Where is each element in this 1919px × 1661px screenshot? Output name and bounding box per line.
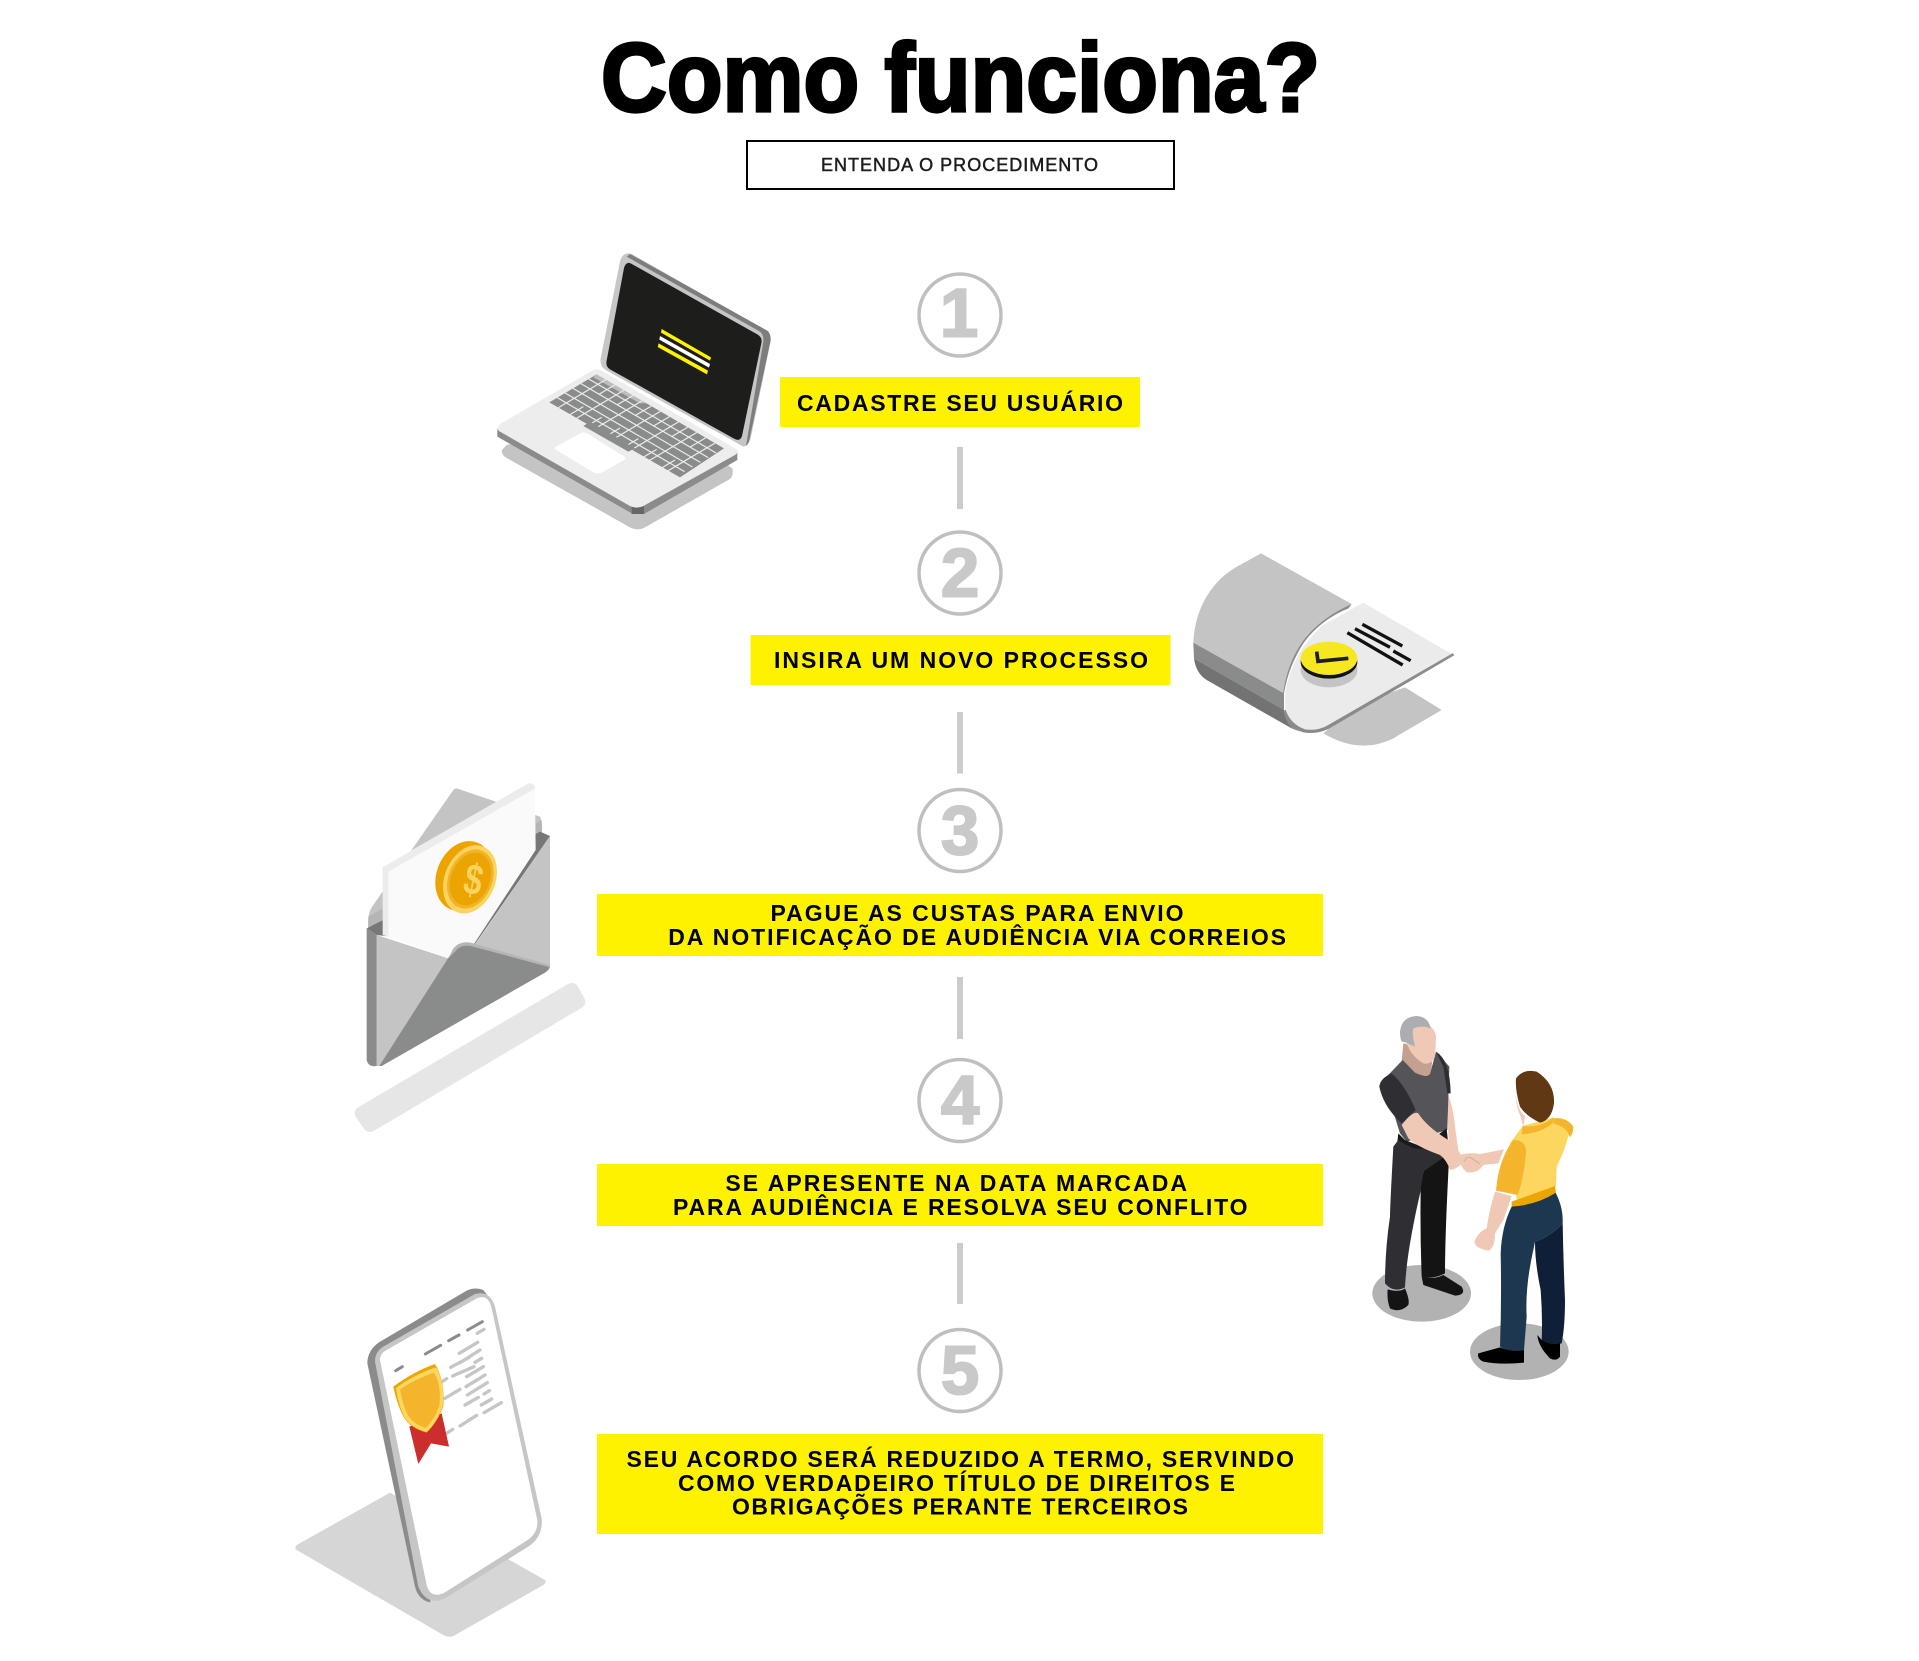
step 5 number badge bbox=[919, 1330, 1001, 1412]
step 2 label: INSIRA UM NOVO PROCESSO bbox=[774, 647, 1148, 673]
keyboard bbox=[549, 374, 724, 477]
connector 3 to 4 bbox=[957, 977, 963, 1039]
step 5 label: OBRIGAÇÕES PERANTE TERCEIROS bbox=[732, 1492, 1188, 1520]
ribbon bbox=[409, 1413, 449, 1464]
younger man bbox=[1458, 1071, 1573, 1364]
step 1 number badge bbox=[919, 274, 1001, 356]
step 2 label bbox=[750, 635, 1170, 685]
connector 4 to 5 bbox=[957, 1243, 963, 1304]
coin bbox=[425, 832, 507, 922]
step 3 label bbox=[597, 894, 1323, 956]
step 4 label: PARA AUDIÊNCIA E RESOLVA SEU CONFLITO bbox=[673, 1193, 1248, 1220]
illustration: handshake between two people bbox=[1372, 1016, 1573, 1380]
step 2 number badge bbox=[919, 532, 1001, 614]
icon: document with seal bbox=[1193, 553, 1453, 746]
connector 2 to 3 bbox=[957, 712, 963, 774]
step 1 number badge: 1 bbox=[940, 274, 978, 352]
step 4 number badge: 4 bbox=[941, 1062, 979, 1138]
step 3 label: PAGUE AS CUSTAS PARA ENVIO bbox=[770, 900, 1184, 926]
title: Como funciona? bbox=[601, 23, 1320, 132]
icon: laptop bbox=[497, 253, 771, 529]
icon: phone with certificate bbox=[295, 1288, 546, 1637]
subtitle box bbox=[747, 141, 1174, 189]
step 5 label: COMO VERDADEIRO TÍTULO DE DIREITOS E bbox=[678, 1469, 1235, 1496]
step 4 label bbox=[597, 1164, 1323, 1226]
subtitle box: ENTENDA O PROCEDIMENTO bbox=[821, 155, 1098, 175]
step 5 number badge: 5 bbox=[941, 1332, 979, 1409]
older man bbox=[1379, 1016, 1463, 1310]
connector 1 to 2 bbox=[957, 447, 963, 509]
step 3 number badge bbox=[919, 790, 1001, 872]
step 3 label: DA NOTIFICAÇÃO DE AUDIÊNCIA VIA CORREIOS bbox=[668, 923, 1286, 950]
step 3 number badge: 3 bbox=[941, 792, 979, 869]
floor shadow bar bbox=[362, 990, 578, 1125]
step 1 label bbox=[780, 377, 1140, 427]
step 2 number badge: 2 bbox=[941, 534, 979, 612]
step 4 number badge bbox=[919, 1060, 1001, 1142]
coin: $ bbox=[459, 854, 487, 906]
step 5 label: SEU ACORDO SERÁ REDUZIDO A TERMO, SERVINDO bbox=[626, 1445, 1294, 1472]
document text lines bbox=[396, 1322, 501, 1434]
icon: envelope with coin bbox=[362, 783, 578, 1125]
step 5 label bbox=[597, 1434, 1323, 1534]
step 4 label: SE APRESENTE NA DATA MARCADA bbox=[725, 1170, 1187, 1196]
shield badge bbox=[393, 1364, 444, 1433]
step 1 label: CADASTRE SEU USUÁRIO bbox=[797, 389, 1123, 416]
